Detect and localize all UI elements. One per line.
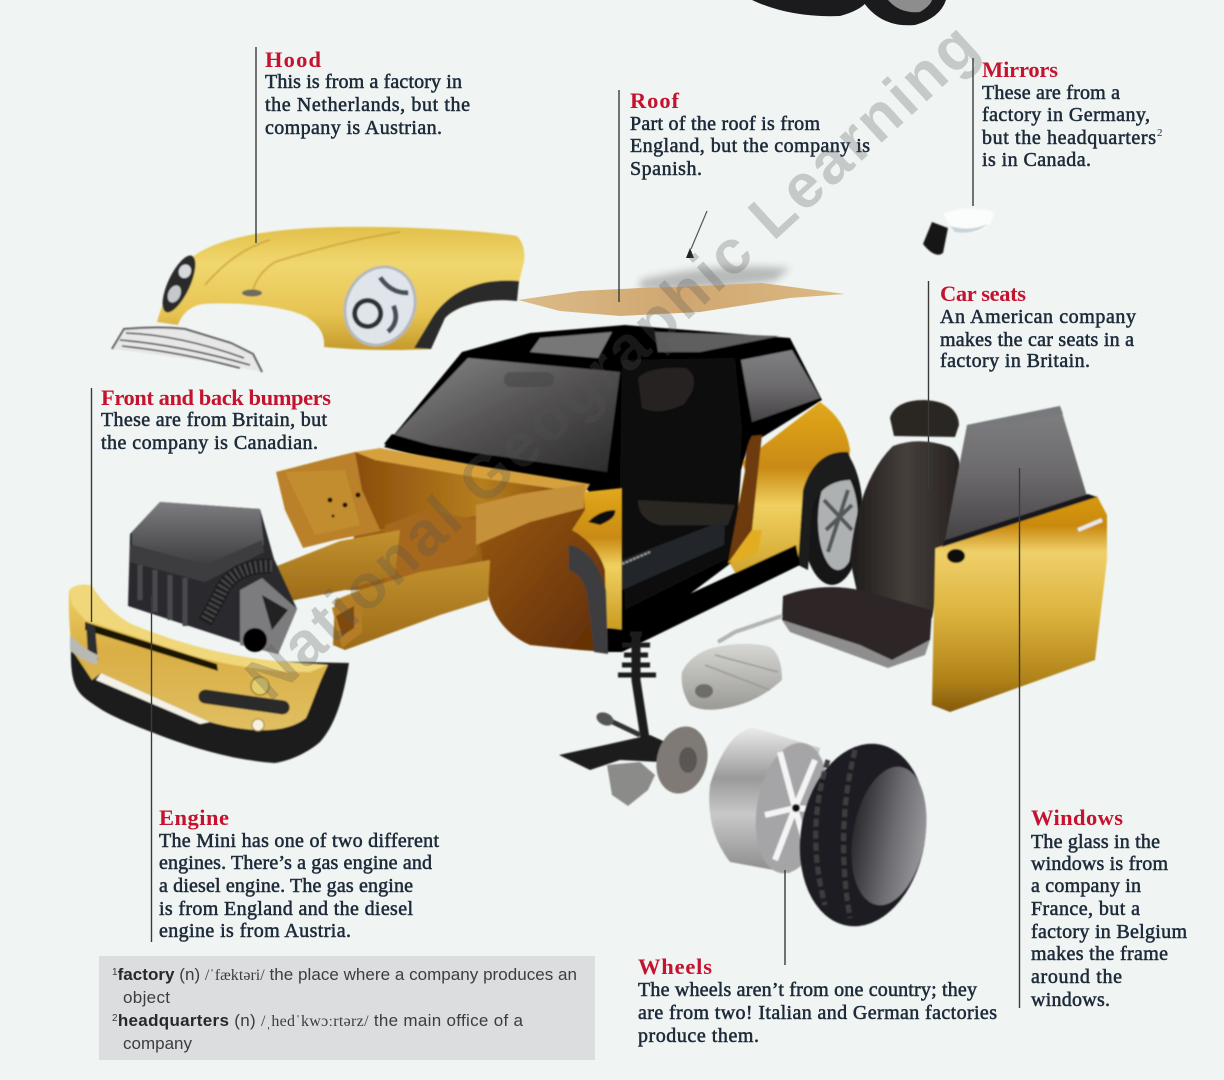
body: Mirrors: is in Canada. (982, 149, 1091, 171)
body: Engine: is from England and the diesel (159, 898, 413, 920)
body: bumpers: These are from Britain, but (101, 409, 327, 431)
windshield base (384, 434, 592, 488)
rear side window (741, 350, 820, 422)
illustration: seat (782, 400, 961, 668)
text block: Car seats (940, 281, 1136, 372)
body: Mirrors: but the headquarters (982, 127, 1156, 149)
heading: Windows: Windows (1031, 805, 1123, 830)
rear door jamb (728, 435, 762, 563)
control arm (559, 735, 672, 770)
strut rod (636, 632, 646, 745)
bumper white opening (96, 673, 210, 724)
air intake hose (205, 566, 272, 622)
illustration: roof panel and antenna (518, 211, 845, 316)
strut tower (276, 452, 385, 548)
door panel (932, 496, 1107, 712)
rail end (332, 592, 362, 648)
rear rim (818, 470, 858, 570)
body: Windows: France, but a (1031, 898, 1140, 920)
rear seat headrest (638, 368, 694, 411)
watermark: National Geographic Learning (233, 11, 991, 713)
body: bumpers: the company is Canadian. (101, 432, 318, 454)
body: Windows: The glass in the (1031, 831, 1160, 853)
door lock (947, 549, 965, 563)
heading: Wheels: Wheels (638, 954, 712, 979)
text block: Engine (159, 805, 439, 942)
rear seat cushion (638, 500, 735, 525)
body: Engine (159, 830, 439, 942)
glossary entry: factory: (n) /ˈfæktəri/ the place where a company produces an (179, 965, 577, 984)
body: Wheels: The wheels aren’t from one country; they (638, 979, 977, 1001)
body: Car seats: An American company (940, 306, 1136, 328)
body: Car seats: makes the car seats in a (940, 329, 1134, 351)
illustration: hood (156, 227, 524, 357)
glossary entry: factory: factory (118, 965, 175, 984)
leader line: windows (1018, 468, 1020, 1008)
leader line: mirrors (972, 58, 974, 206)
body: Car seats: factory in Britain. (940, 350, 1090, 372)
mirror reflection (504, 372, 554, 387)
headlight right (332, 255, 428, 357)
bumper black lip (71, 650, 349, 763)
tie rod (598, 715, 640, 735)
glossary entry: headquarters: (n) /ˌhedˈkwɔːrtərz/ the main office of a (234, 1011, 523, 1030)
heading: Front and back bumpers: Front and back bumpers (101, 385, 331, 410)
antenna (691, 211, 707, 249)
text block: Mirrors (982, 57, 1162, 171)
illustration: suspension and brake (559, 632, 714, 806)
bumper body (69, 585, 328, 730)
text block: Front and back bumpers (101, 385, 331, 454)
strut spring (618, 634, 656, 675)
illustration: mirror (923, 209, 994, 255)
heading: Hood: Hood (265, 47, 321, 72)
body: Windows: factory in Belgium (1031, 921, 1187, 943)
body: Roof: England, but the company is (630, 135, 870, 157)
body: Engine: engine is from Austria. (159, 920, 351, 942)
seat back (850, 441, 961, 618)
illustration: grille (112, 328, 262, 372)
hood badge (242, 290, 262, 296)
sill (606, 545, 800, 652)
leader line: car seats (928, 281, 930, 490)
front arch trim (569, 545, 608, 654)
glossary footnote box (99, 956, 595, 1060)
illustration: car body (384, 325, 863, 652)
inner rail (385, 510, 480, 590)
leader line: bumpers (90, 388, 92, 622)
door glass (945, 406, 1087, 540)
rear tyre (801, 445, 863, 585)
door sill plate (622, 520, 725, 590)
headlight left (156, 251, 202, 317)
door pillar gold (728, 530, 762, 563)
text block: Hood (265, 47, 470, 139)
hood wheel arch (414, 281, 519, 349)
reflector (252, 719, 264, 731)
body: Roof: Spanish. (630, 158, 702, 180)
front fender yellow (572, 488, 622, 630)
body: Car seats (940, 306, 1136, 372)
rear wheel arch (798, 452, 858, 570)
heading: Car seats: Car seats (940, 281, 1026, 306)
illustration: bumper (69, 585, 349, 763)
illustration: front shell, engine bay (272, 448, 622, 654)
engine block (128, 502, 297, 654)
headrest (890, 400, 959, 437)
body: Wheels (638, 979, 997, 1047)
body: bumpers (101, 409, 327, 454)
upper fender gold (476, 484, 585, 545)
rear quarter panel (728, 402, 850, 590)
heading: Roof: Roof (630, 88, 680, 113)
glossary entry: headquarters (112, 1011, 524, 1053)
body: Mirrors (982, 82, 1162, 171)
fog light (251, 677, 269, 695)
body: Wheels: are from two! Italian and German factories (638, 1002, 997, 1024)
leader line: engine (150, 596, 152, 942)
body black frame (384, 325, 822, 645)
body: Windows: windows. (1031, 989, 1110, 1011)
glossary entry: headquarters: company (123, 1034, 192, 1053)
roof glass left (530, 332, 612, 358)
body: Mirrors: 2 (1157, 127, 1162, 139)
roof glass right (655, 332, 780, 352)
illustration: muffler and pipe (682, 616, 782, 710)
body: Roof (630, 113, 870, 180)
body: Engine: engines. There’s a gas engine and (159, 852, 432, 874)
body: Hood (265, 71, 470, 139)
firewall (355, 450, 585, 530)
body: Wheels: produce them. (638, 1025, 759, 1047)
illustration: wheel rim (709, 727, 838, 879)
heading: Mirrors: Mirrors (982, 57, 1058, 82)
leader line: roof (618, 90, 620, 302)
glossary entry: headquarters: headquarters (118, 1011, 229, 1030)
leader line: hood (255, 47, 257, 243)
door handle (588, 510, 615, 525)
illustration: tyre (786, 734, 940, 936)
door handle (1078, 520, 1102, 530)
bumper pad (197, 689, 291, 715)
illustration: door (932, 406, 1107, 712)
body: Mirrors: factory in Germany, (982, 104, 1150, 126)
body: Engine: a diesel engine. The gas engine (159, 875, 413, 897)
body: Hood: the Netherlands, but the (265, 94, 470, 116)
body: Mirrors: These are from a (982, 82, 1120, 104)
leader line: wheels (784, 870, 786, 965)
interior (620, 358, 742, 610)
lower rail (333, 560, 490, 650)
wheel well (476, 500, 608, 652)
body: Windows: windows is from (1031, 853, 1168, 875)
text block: Wheels (638, 954, 997, 1047)
body: Roof: Part of the roof is from (630, 113, 820, 135)
timing cover (240, 578, 297, 654)
bay backing (345, 480, 490, 590)
upper rail (272, 530, 400, 602)
body: Windows: a company in (1031, 875, 1141, 897)
illustration: engine (128, 502, 297, 654)
windshield (392, 358, 620, 472)
body: Engine: The Mini has one of two different (159, 830, 439, 852)
body: Hood: This is from a factory in (265, 71, 462, 93)
glossary entry: factory: object (123, 988, 170, 1007)
text block: Roof (630, 88, 870, 180)
text block: Windows (1031, 805, 1187, 1011)
glossary entry: factory (112, 965, 577, 1007)
engine top cover (132, 502, 264, 565)
body: Windows: around the (1031, 966, 1122, 988)
bumper slit (85, 622, 218, 671)
body: Windows: makes the frame (1031, 943, 1168, 965)
heading: Engine: Engine (159, 805, 229, 830)
brake caliper (607, 762, 655, 806)
seat cushion (782, 587, 932, 662)
brake disc (650, 721, 714, 799)
bumper side lamp (86, 622, 98, 660)
glossary entry: factory: 1 (112, 967, 118, 978)
body: Windows (1031, 831, 1187, 1011)
illustration: tyre of car above, cropped at the top (752, 0, 946, 25)
body: Hood: company is Austrian. (265, 117, 442, 139)
glossary entry: headquarters: 2 (112, 1013, 118, 1024)
